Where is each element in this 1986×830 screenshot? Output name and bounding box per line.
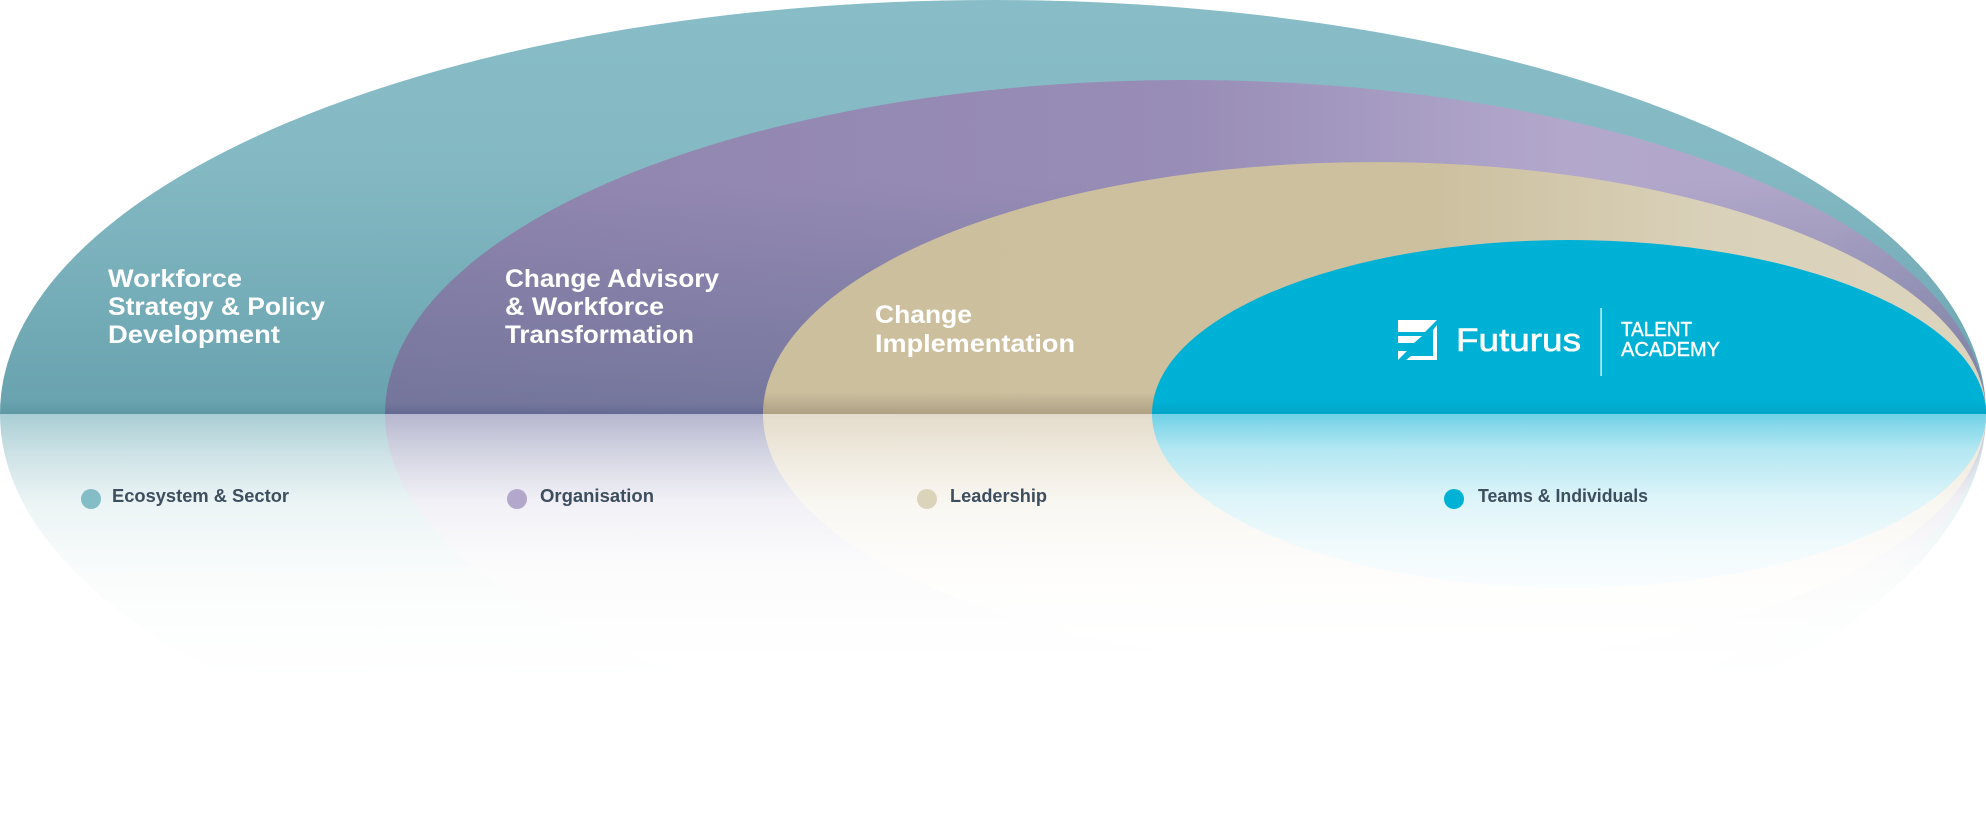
logo: futurus talent academy	[1398, 308, 1720, 376]
talent academy label: ACADEMY	[1621, 339, 1720, 361]
legend: ecosystem and sector: Ecosystem & Sector	[112, 486, 289, 506]
panel: leadership ellipse	[763, 162, 1986, 666]
panel: organisation ellipse	[385, 80, 1986, 748]
heading: change implementation	[875, 301, 1075, 358]
legend: organisation	[507, 486, 654, 509]
heading: workforce strategy: Development	[108, 321, 281, 349]
heading: workforce strategy: Strategy & Policy	[108, 293, 325, 321]
heading: workforce strategy	[108, 265, 325, 349]
legend: leadership: Leadership	[950, 486, 1047, 506]
heading: change advisory	[505, 265, 719, 349]
legend: leadership	[917, 486, 1047, 509]
heading: change advisory: & Workforce	[505, 293, 664, 321]
legend: teams and individuals: Teams & Individuals	[1478, 486, 1648, 506]
wordmark: Futurus	[1456, 322, 1581, 358]
talent academy label: TALENT	[1621, 319, 1692, 341]
heading: change implementation: Change	[875, 301, 972, 329]
heading: workforce strategy: Workforce	[108, 265, 242, 293]
divider	[1600, 308, 1602, 376]
legend: organisation: Organisation	[540, 486, 654, 506]
heading: change advisory: Change Advisory	[505, 265, 719, 293]
icon: futurus mark	[1398, 320, 1437, 360]
talent academy label	[1621, 319, 1720, 361]
heading: change implementation: Implementation	[875, 330, 1075, 358]
heading: change advisory: Transformation	[505, 321, 694, 349]
panel: teams and individuals ellipse	[1152, 240, 1986, 588]
